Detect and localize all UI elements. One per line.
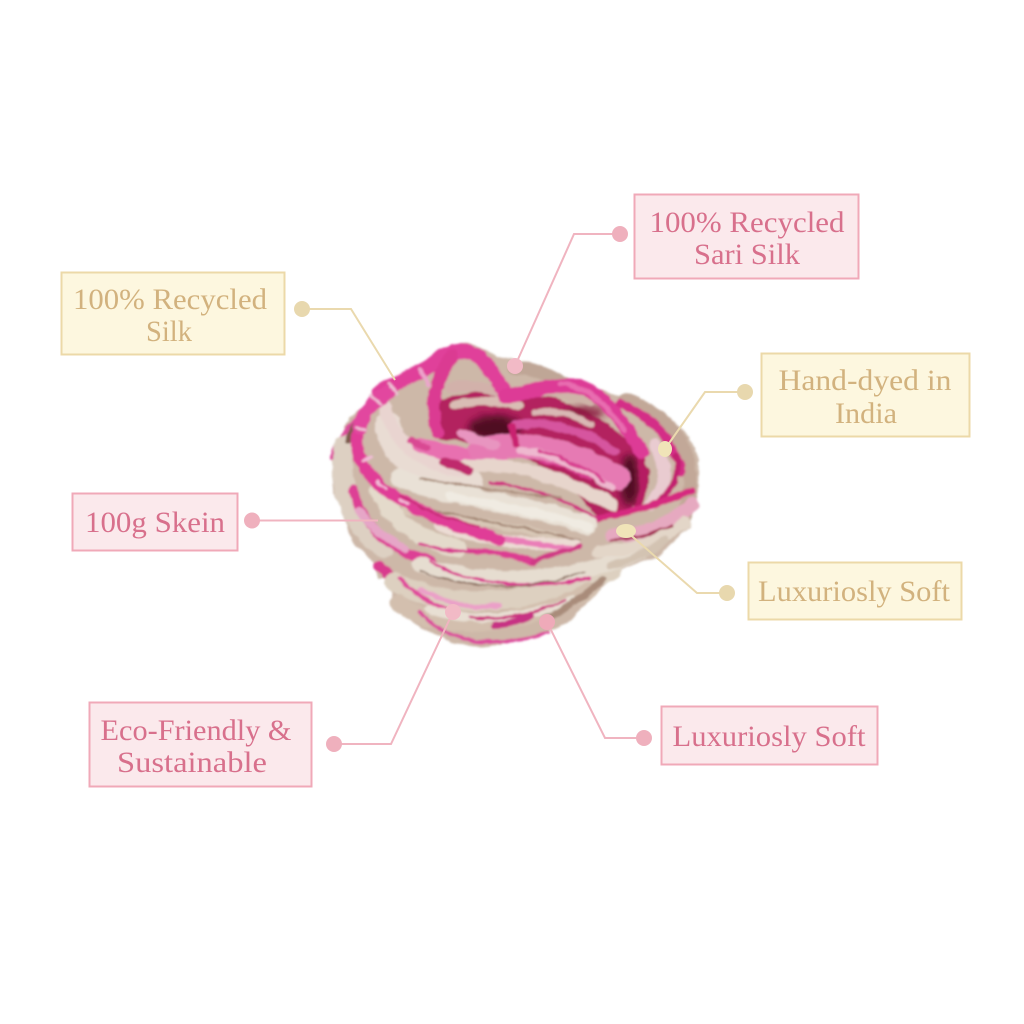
- central bands: [388, 425, 470, 482]
- callout: Luxuriosly Soft (cream): [748, 562, 962, 620]
- pink rope on top: [380, 351, 503, 392]
- right pink rope: [505, 385, 642, 452]
- callout: 100% Recycled Sari Silk: [634, 194, 858, 278]
- leader: Luxuriosly Soft (cream): [616, 524, 735, 601]
- callout: 100g Skein: 100g Skein: [85, 506, 225, 539]
- main pink rope on left: [357, 436, 500, 540]
- outer left edge: [332, 412, 365, 457]
- tail end: [379, 566, 388, 574]
- callout: Luxuriosly Soft (pink): [662, 706, 878, 764]
- right outer coil: [625, 400, 690, 515]
- callout: 100% Recycled Silk: 100% Recycled: [73, 283, 267, 316]
- callout: 100% Recycled Silk: [62, 272, 284, 354]
- callout: Hand-dyed in India: Hand-dyed in: [778, 364, 952, 397]
- callout: Hand-dyed in India: India: [835, 397, 897, 430]
- callout: Eco-Friendly & Sustainable: Sustainable: [117, 746, 267, 779]
- callout: 100% Recycled Sari Silk: Sari Silk: [694, 238, 800, 271]
- lower tiers: [395, 570, 612, 601]
- illustration: silk yarn skein: [332, 343, 699, 647]
- nest strands: [455, 401, 520, 406]
- leader: Hand-dyed in India: [658, 384, 753, 457]
- callout: 100% Recycled Silk: Silk: [146, 315, 192, 348]
- callout: Hand-dyed in India: [762, 354, 970, 436]
- callout: Luxuriosly Soft (pink): Luxuriosly Soft: [672, 720, 866, 753]
- callout: 100g Skein: [72, 494, 238, 550]
- leader: 100g Skein: [244, 512, 378, 528]
- callout: Luxuriosly Soft (cream): Luxuriosly Soft: [758, 575, 951, 608]
- callout: Eco-Friendly & Sustainable: [90, 702, 312, 786]
- callout: 100% Recycled Sari Silk: 100% Recycled: [650, 206, 844, 239]
- leader: Eco-Friendly & Sustainable: [326, 604, 461, 752]
- dark nest centre: [440, 390, 650, 520]
- nest cover strands: [520, 390, 590, 400]
- leader: Luxuriosly Soft (pink): [539, 614, 652, 746]
- leader: 100% Recycled Silk: [294, 301, 395, 380]
- callout: Eco-Friendly & Sustainable: Eco-Friendly &: [100, 714, 292, 747]
- leader: 100% Recycled Sari Silk: [507, 226, 628, 374]
